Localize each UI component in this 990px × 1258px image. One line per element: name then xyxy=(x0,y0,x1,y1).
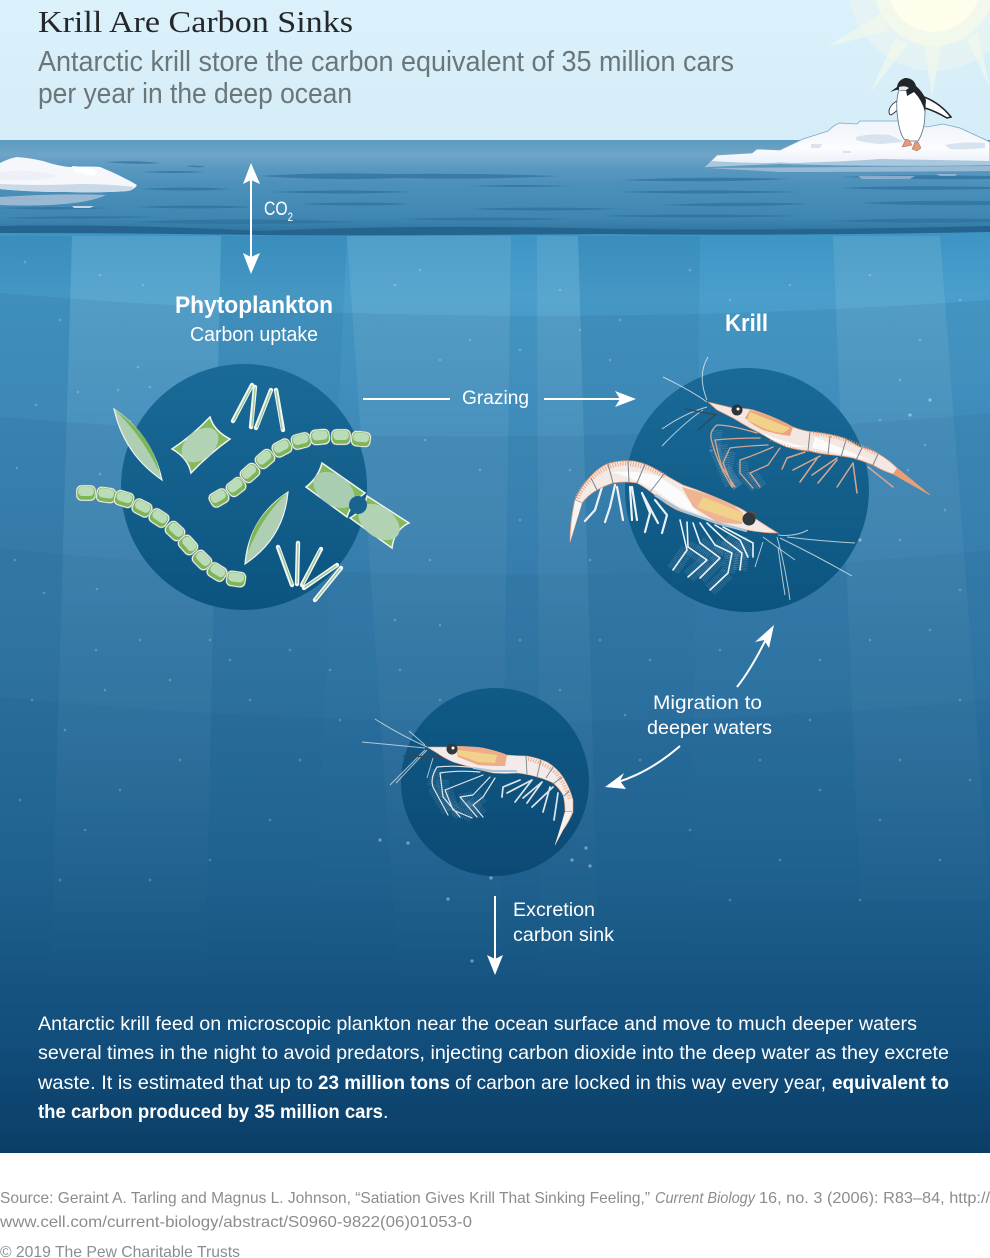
body text: several times in the night to avoid predators, injecting carbon dioxide into the deep water as they excrete xyxy=(38,1042,949,1064)
iceberg with penguin: right xyxy=(705,78,990,179)
label: migration: deeper waters xyxy=(647,717,772,739)
source note: Source: Geraint A. Tarling and Magnus L. Johnson, “Satiation Gives Krill That Sinking Feeling,” xyxy=(0,1190,650,1207)
title: Krill Are Carbon Sinks xyxy=(38,4,353,39)
source note: 16, no. 3 (2006): R83–84, http:// xyxy=(759,1190,990,1207)
body text xyxy=(37,1013,949,1123)
label: CO2: 2 xyxy=(288,210,293,224)
sky background xyxy=(0,0,990,141)
body text: . xyxy=(383,1101,388,1123)
label: excretion: Excretion xyxy=(513,899,595,921)
arrow: excretion xyxy=(487,896,503,975)
body text: Antarctic krill feed on microscopic plankton near the ocean surface and move to much deeper waters xyxy=(38,1013,917,1035)
subtitle xyxy=(38,46,734,110)
panel: krill disc xyxy=(570,357,930,612)
label: Grazing: Grazing xyxy=(462,387,529,409)
label: excretion: carbon sink xyxy=(513,924,614,946)
panel: deep krill disc xyxy=(362,688,589,876)
body text: waste. It is estimated that up to xyxy=(37,1072,313,1094)
algae chain: lower xyxy=(76,485,247,588)
diatom: square xyxy=(172,417,230,473)
arrow: migration up xyxy=(737,625,774,687)
arrow: CO2 exchange xyxy=(243,163,260,274)
label: Carbon uptake: Carbon uptake xyxy=(190,324,318,346)
krill: deep water xyxy=(362,719,573,845)
algae chain: upper xyxy=(206,428,372,510)
body text: the carbon produced by 35 million cars xyxy=(38,1101,383,1123)
diatom: leaf left xyxy=(114,409,162,480)
diatom: lower rods xyxy=(278,543,341,600)
diatom: leaf centre xyxy=(245,492,288,564)
label: CO2: CO xyxy=(264,198,293,220)
subtitle: Antarctic krill store the carbon equivalent of 35 million cars xyxy=(38,46,734,78)
diatom: double cell xyxy=(306,463,409,548)
body text: equivalent to xyxy=(832,1072,949,1094)
body text: of carbon are locked in this way every year, xyxy=(455,1072,826,1094)
iceberg: left xyxy=(0,157,137,208)
body text: 23 million tons xyxy=(318,1072,450,1094)
subtitle: per year in the deep ocean xyxy=(38,78,352,110)
arrow: migration down xyxy=(605,746,680,789)
diatom: upper rods xyxy=(233,385,283,430)
source note xyxy=(0,1190,990,1231)
krill: lower large xyxy=(570,461,855,600)
source note: www.cell.com/current-biology/abstract/S0960-9822(06)01053-0 xyxy=(0,1214,472,1231)
icon: penguin xyxy=(889,78,951,151)
label: excretion xyxy=(513,899,614,946)
label: migration xyxy=(647,692,772,739)
heading: Krill: Krill xyxy=(725,310,768,337)
heading: Phytoplankton: Phytoplankton xyxy=(175,292,333,319)
source note: Current Biology xyxy=(655,1190,756,1207)
particles xyxy=(15,262,970,961)
panel: phytoplankton disc xyxy=(76,364,409,610)
ocean surface xyxy=(0,140,990,235)
label: migration: Migration to xyxy=(653,692,762,714)
water column with light rays xyxy=(0,232,990,1153)
arrow: grazing xyxy=(363,391,636,407)
sun xyxy=(827,0,990,97)
krill: upper xyxy=(662,357,930,495)
